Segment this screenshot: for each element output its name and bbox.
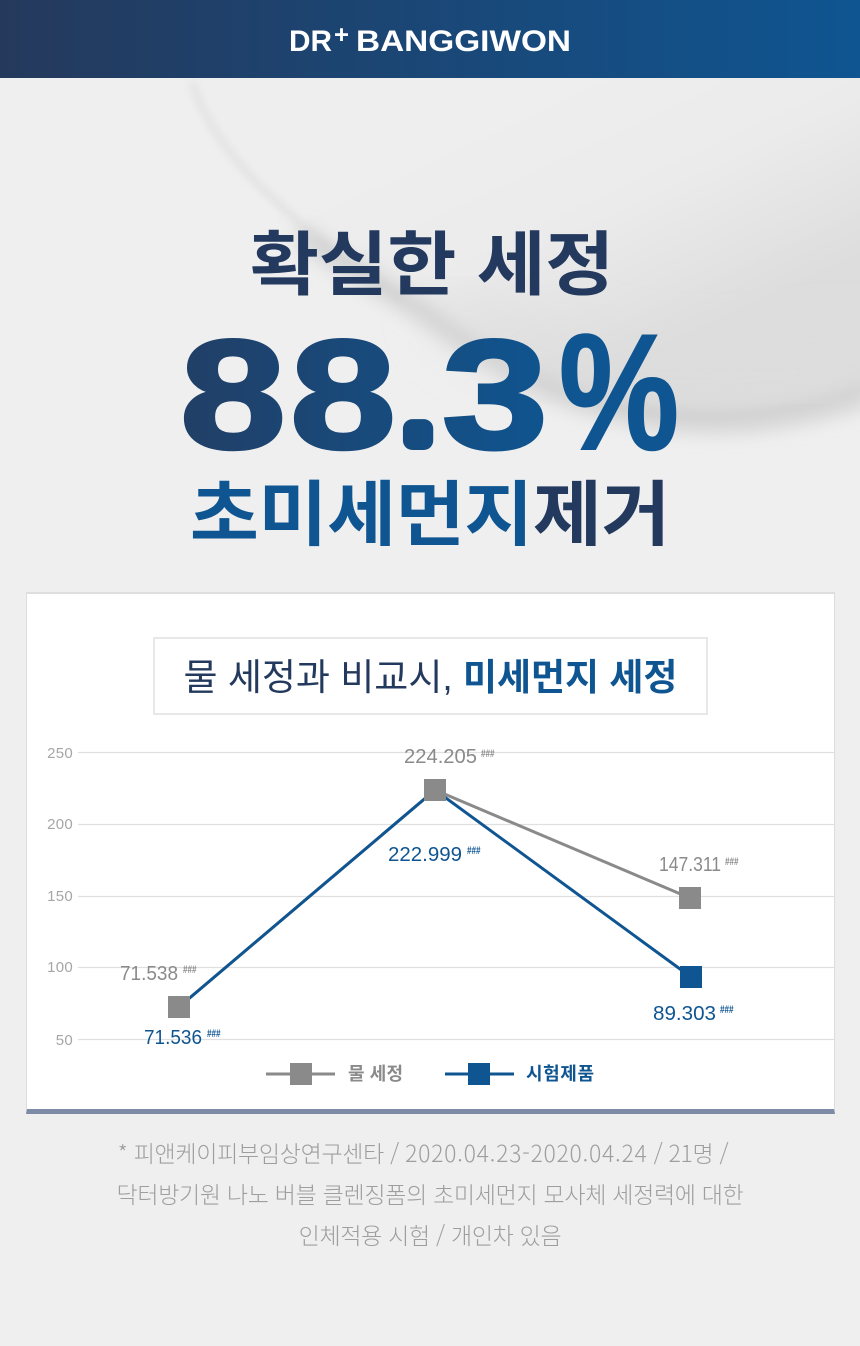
data labels: water wash: 147.311 <box>659 854 721 876</box>
data labels: water wash: 71.538 <box>120 963 178 985</box>
background: foam texture <box>194 90 860 438</box>
big number: 88.3%: 3 <box>442 308 548 480</box>
subheading: 초미세먼지제거: 초미세먼지제거 <box>190 475 670 555</box>
logo: BANGGIWON <box>356 25 571 58</box>
data labels: test product <box>144 844 734 1049</box>
footnote: 닥터방기원 나노 버블 클렌징폼의 초미세먼지 모사체 세정력에 대한 <box>116 1176 744 1210</box>
axis labels <box>47 745 73 1049</box>
line chart <box>47 745 834 1085</box>
logo: DR <box>289 25 332 58</box>
data labels: test product: 222.999 <box>388 844 462 866</box>
series: water wash <box>179 790 690 1007</box>
chart title box: 물 세정과 비교시, 미세먼지 세정 <box>184 657 677 698</box>
legend: test product <box>445 1063 594 1085</box>
big number: 88.3%: . <box>407 368 429 458</box>
footnote: 인체적용 시험 / 개인차 있음 <box>299 1217 561 1251</box>
footnote: * 피앤케이피부임상연구센타 / 2020.04.23-2020.04.24 / 21명 / <box>118 1135 728 1169</box>
axis labels: 250 <box>47 745 73 762</box>
data labels: water wash: ### <box>725 856 738 868</box>
data labels: water wash: ### <box>183 964 196 976</box>
data labels: water wash: 224.205 <box>404 746 477 768</box>
header bar <box>0 0 860 78</box>
axis labels: 100 <box>47 959 73 976</box>
logo <box>289 21 571 58</box>
series: test product <box>179 790 702 1007</box>
data labels: test product: 89.303 <box>653 1003 716 1025</box>
big number: 88.3%: 8 <box>180 308 286 480</box>
data labels: water wash <box>120 746 738 985</box>
panel: comparison chart <box>26 592 835 1114</box>
big number: 88.3% <box>180 300 679 480</box>
legend: test product: 시험제품 <box>526 1064 594 1084</box>
data labels: test product: ### <box>207 1028 220 1040</box>
axis labels: 50 <box>56 1032 73 1049</box>
legend: water wash <box>266 1063 403 1085</box>
axis labels: 200 <box>47 816 73 833</box>
data labels: test product: 71.536 <box>144 1027 202 1049</box>
data labels: test product: ### <box>467 845 480 857</box>
big number: 88.3%: % <box>559 300 679 480</box>
axis labels: 150 <box>47 888 73 905</box>
logo: + <box>334 21 349 49</box>
legend: water wash: 물 세정 <box>348 1064 403 1084</box>
big number: 88.3%: 8 <box>290 308 396 480</box>
heading: 확실한 세정: 확실한 세정 <box>250 226 614 304</box>
chart title box <box>153 637 708 715</box>
footnote <box>116 1135 744 1251</box>
markers: water wash <box>168 779 701 1018</box>
data labels: test product: ### <box>720 1004 734 1016</box>
data labels: water wash: ### <box>481 748 494 760</box>
